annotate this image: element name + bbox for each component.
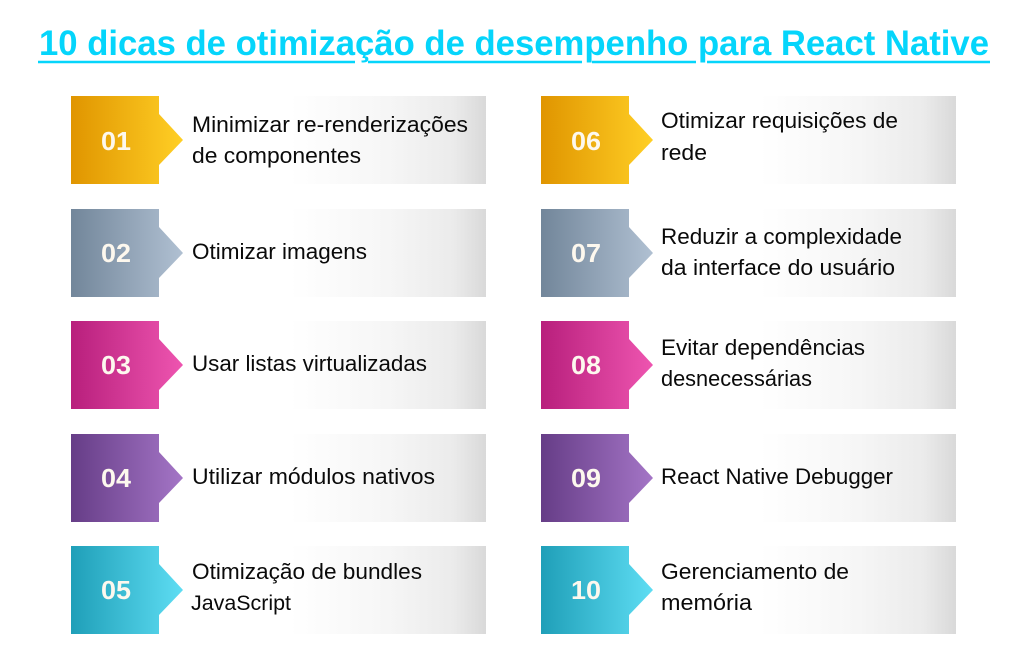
panel: tip 09 <box>541 434 956 522</box>
text: tip 10: Gerenciamento de <box>661 559 849 584</box>
arrow badge 07 <box>541 209 653 297</box>
text: tip 10: memória <box>661 590 753 615</box>
number 02: 02 <box>101 238 131 268</box>
text: tip 06: Otimizar requisições de <box>661 108 898 133</box>
text: tip 09: React Native Debugger <box>661 464 893 489</box>
number 01: 01 <box>101 126 131 156</box>
number 07: 07 <box>571 238 601 268</box>
text: tip 05: Otimização de bundles <box>192 559 422 584</box>
arrow badge 10 <box>541 546 653 634</box>
panel: tip 01 <box>71 96 486 184</box>
arrow badge 05 <box>71 546 183 634</box>
text: tip 06: rede <box>661 140 707 165</box>
panel: tip 08 <box>541 321 956 409</box>
arrow badge 03 <box>71 321 183 409</box>
number 10: 10 <box>571 575 601 605</box>
panel: tip 04 <box>71 434 486 522</box>
text: tip 07: da interface do usuário <box>661 255 895 280</box>
text: tip 01: Minimizar re-renderizações <box>192 112 468 137</box>
panel: tip 06 <box>541 96 956 184</box>
number 08: 08 <box>571 350 601 380</box>
panel: tip 07 <box>541 209 956 297</box>
text: tip 07: Reduzir a complexidade <box>661 224 902 249</box>
text: tip 02: Otimizar imagens <box>192 239 367 264</box>
panel: tip 05 <box>71 546 486 634</box>
number 03: 03 <box>101 350 131 380</box>
title: 10 dicas de otimização de desempenho para React Native <box>39 24 989 63</box>
arrow badge 09 <box>541 434 653 522</box>
arrow badge 04 <box>71 434 183 522</box>
number 05: 05 <box>101 575 131 605</box>
number 09: 09 <box>571 463 601 493</box>
panel: tip 03 <box>71 321 486 409</box>
text: tip 08: Evitar dependências <box>661 335 865 360</box>
arrow badge 02 <box>71 209 183 297</box>
panel: tip 02 <box>71 209 486 297</box>
arrow badge 08 <box>541 321 653 409</box>
text: tip 05: JavaScript <box>191 592 291 615</box>
text: tip 03: Usar listas virtualizadas <box>192 351 427 376</box>
number 04: 04 <box>101 463 132 493</box>
number 06: 06 <box>571 126 601 156</box>
text: tip 04: Utilizar módulos nativos <box>192 464 435 489</box>
text: tip 08: desnecessárias <box>661 366 812 391</box>
panel: tip 10 <box>541 546 956 634</box>
text: tip 01: de componentes <box>192 143 361 168</box>
arrow badge 01 <box>71 96 183 184</box>
arrow badge 06 <box>541 96 653 184</box>
